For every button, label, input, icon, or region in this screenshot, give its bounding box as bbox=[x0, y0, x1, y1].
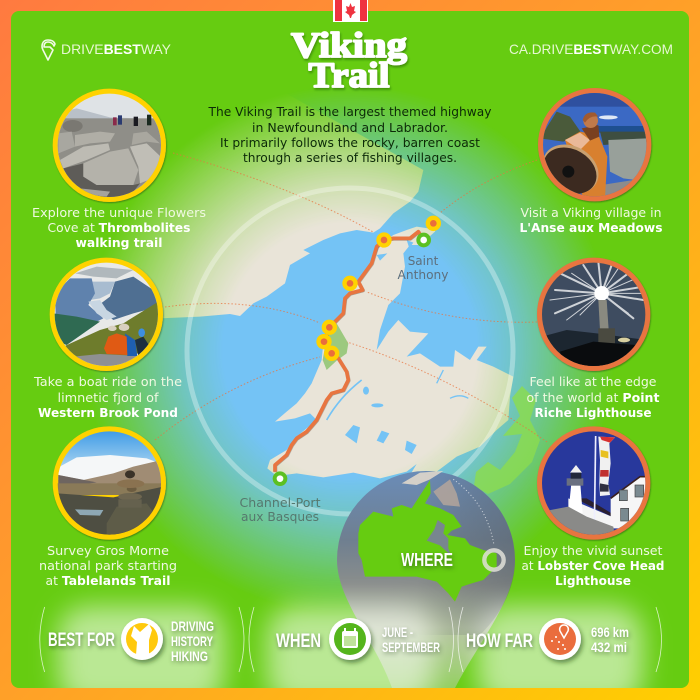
route on globe bbox=[453, 479, 494, 545]
place label: Channel-Port aux Basques: Channel-Port bbox=[240, 496, 321, 510]
logo bbox=[42, 40, 172, 60]
caption: Western Brook Pond: limnetic fjord of bbox=[58, 391, 159, 405]
intro text: The Viking Trail is the largest themed highway bbox=[207, 105, 492, 119]
title: Trail bbox=[308, 55, 390, 95]
list: activities: HIKING bbox=[171, 648, 208, 664]
caption: Thrombolites: Cove at Thrombolites bbox=[48, 221, 190, 235]
caption: Western Brook Pond: Western Brook Pond bbox=[38, 406, 178, 420]
title: Viking bbox=[291, 25, 407, 65]
caption: L'Anse aux Meadows bbox=[520, 206, 662, 235]
distance bbox=[591, 624, 629, 655]
photo: Viking village bbox=[534, 88, 651, 203]
caption: L'Anse aux Meadows: L'Anse aux Meadows bbox=[520, 221, 662, 235]
icon: best for bbox=[121, 618, 163, 660]
photo: Tablelands Trail bbox=[53, 426, 166, 540]
distance: 696 km bbox=[591, 624, 629, 640]
map of northern Newfoundland bbox=[90, 90, 610, 608]
website url: CA.DRIVEBESTWAY.COM bbox=[509, 41, 673, 57]
dates bbox=[382, 624, 440, 655]
dates: SEPTEMBER bbox=[382, 639, 440, 655]
title bbox=[291, 25, 407, 95]
panel: best for: BEST FOR bbox=[48, 630, 115, 651]
caption: Point Riche Lighthouse: Riche Lighthouse bbox=[534, 406, 652, 420]
location ring bbox=[484, 550, 504, 570]
caption: Western Brook Pond bbox=[33, 375, 182, 420]
dotted connector lines bbox=[155, 153, 547, 442]
caption: Western Brook Pond: Take a boat ride on the bbox=[33, 375, 182, 389]
Canadian flag bbox=[333, 0, 368, 22]
place label: Saint Anthony: Saint bbox=[408, 254, 439, 268]
photo: Lobster Cove Head Lighthouse bbox=[537, 426, 650, 540]
caption: Point Riche Lighthouse bbox=[526, 375, 660, 420]
caption: Thrombolites: Explore the unique Flowers bbox=[32, 206, 206, 220]
icon: calendar bbox=[329, 618, 371, 660]
panel: when: WHEN bbox=[276, 631, 321, 652]
caption: Tablelands Trail bbox=[39, 544, 177, 588]
photo: Western Brook Pond bbox=[50, 258, 163, 371]
intro text: through a series of fishing villages. bbox=[243, 151, 457, 165]
caption: L'Anse aux Meadows: Visit a Viking village in bbox=[520, 206, 662, 220]
caption: Lobster Cove Head Lighthouse: at Lobster Cove Head bbox=[522, 559, 664, 573]
dates: JUNE - bbox=[382, 624, 413, 640]
caption: Point Riche Lighthouse: of the world at Point bbox=[526, 391, 660, 405]
intro text: in Newfoundland and Labrador. bbox=[252, 121, 448, 135]
Hudson Bay bbox=[427, 520, 451, 556]
caption: Thrombolites: walking trail bbox=[76, 236, 162, 250]
list: activities: HISTORY bbox=[171, 633, 213, 649]
intro text: It primarily follows the rocky, barren coast bbox=[220, 136, 480, 150]
caption: Tablelands Trail: at Tablelands Trail bbox=[46, 574, 170, 588]
caption: Lobster Cove Head Lighthouse bbox=[522, 544, 664, 588]
logo: DRIVEBESTWAY bbox=[61, 41, 172, 57]
list: activities: DRIVING bbox=[171, 618, 214, 634]
panel: when bbox=[276, 618, 440, 660]
stop marker centres bbox=[321, 220, 437, 357]
ring around the map bbox=[187, 188, 513, 514]
end markers bbox=[273, 233, 431, 486]
bottom glows bbox=[40, 606, 662, 700]
stop marker bbox=[316, 216, 441, 361]
panel: how far: HOW FAR bbox=[466, 631, 533, 652]
place label: Channel-Port aux Basques: aux Basques bbox=[241, 510, 319, 524]
panel: how far bbox=[466, 618, 629, 660]
caption: Tablelands Trail: Survey Gros Morne bbox=[47, 544, 169, 558]
list: activities bbox=[171, 618, 214, 664]
caption: Thrombolites bbox=[32, 206, 206, 250]
Canada silhouette bbox=[358, 480, 497, 602]
label: WHERE: WHERE bbox=[401, 550, 453, 570]
intro text bbox=[207, 105, 492, 165]
place label: Saint Anthony: Anthony bbox=[398, 268, 448, 282]
caption: Lobster Cove Head Lighthouse: Enjoy the vivid sunset bbox=[524, 544, 663, 558]
distance: 432 mi bbox=[591, 639, 627, 655]
caption: Lobster Cove Head Lighthouse: Lighthouse bbox=[555, 574, 631, 588]
photo: Point Riche Lighthouse bbox=[537, 258, 650, 371]
panel: best for bbox=[48, 618, 214, 664]
caption: Point Riche Lighthouse: Feel like at the edge bbox=[530, 375, 656, 389]
trail route and markers bbox=[273, 216, 441, 486]
photo: Thrombolites bbox=[53, 89, 166, 202]
caption: Tablelands Trail: national park starting bbox=[39, 559, 177, 573]
globe with Canada bbox=[337, 471, 515, 688]
icon: route pin bbox=[539, 618, 581, 660]
